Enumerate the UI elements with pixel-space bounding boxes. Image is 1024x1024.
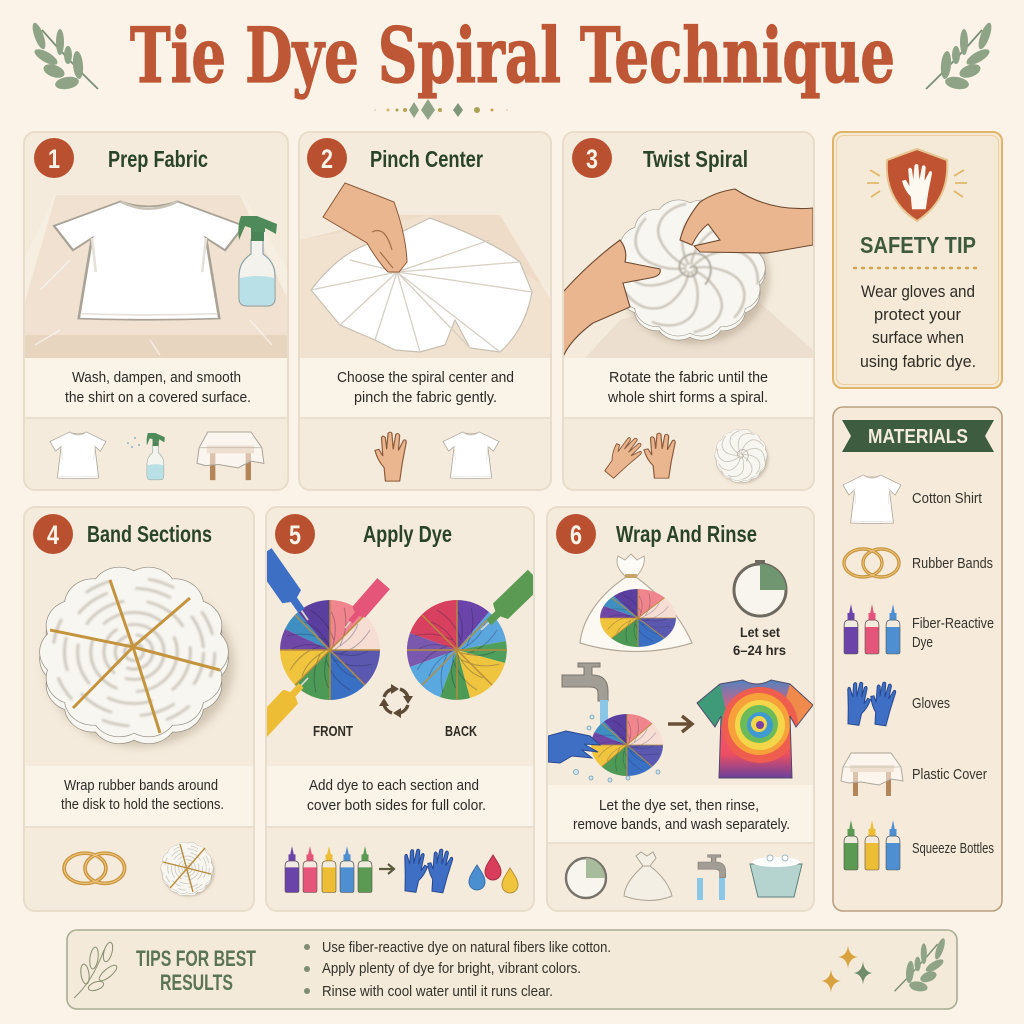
material: cotton shirt: Cotton Shirt [912,491,982,507]
safety text: surface when [872,328,964,347]
step 4 icon strip [64,844,215,897]
material: squeeze bottles [844,820,994,870]
illustration: bag timer rinse and finished shirt [548,554,815,782]
step 2 description: Choose the spiral center and [337,369,514,386]
step 1 icon strip [50,432,264,480]
step 4 description: Wrap rubber bands around [64,777,218,794]
step 2 description: pinch the fabric gently. [354,389,497,406]
icon: tips outline sprig [74,941,119,998]
step 6 description [573,797,790,833]
step 1 number: 1 [48,144,60,174]
step 5 heading: Apply Dye [363,521,452,547]
material: fiber-reactive dye: Dye [912,635,933,651]
tips bullet list: Rinse with cool water until it runs clear. [322,983,553,1000]
step 3 number: 3 [586,144,598,174]
safety text [860,282,976,371]
step 5 description: Add dye to each section and [309,777,479,794]
panel: step 1 prep fabric [24,132,288,490]
illustration: hand pinching fabric [300,183,551,358]
panel: step 4 band sections [24,507,254,911]
step 4 number [33,514,73,554]
material: plastic cover: Plastic Cover [912,767,987,783]
illustration: applying dye front and back [252,548,543,737]
materials banner [842,420,994,452]
panel: materials [833,407,1002,911]
material: rubber bands: Rubber Bands [912,556,993,572]
step 4 description: the disk to hold the sections. [61,796,224,813]
step 4 heading: Band Sections [87,521,212,547]
step 2 heading: Pinch Center [370,146,483,172]
panel: step 5 apply dye [252,507,543,911]
step 3 heading: Twist Spiral [643,146,748,172]
tips heading [136,946,256,995]
material: gloves [843,681,950,726]
illustration: hands twisting disc [563,189,813,358]
step 6 heading: Wrap And Rinse [616,521,757,547]
step 3 description: Rotate the fabric until the [609,369,768,386]
step 2 icon strip [375,432,499,481]
panel: step 6 wrap and rinse [547,507,815,911]
icon: tips right sprig [895,937,947,993]
tips heading: RESULTS [160,970,233,995]
safety text: Wear gloves and [861,282,975,301]
tips bullet list: Use fiber-reactive dye on natural fibers like cotton. [322,939,611,956]
step 6 number [556,514,596,554]
icon: safety shield [867,149,967,221]
step 1 number [34,138,74,178]
step 6 number: 6 [570,520,582,550]
material: gloves: Gloves [912,696,950,712]
material: plastic cover [841,753,987,796]
label: let set time: 6–24 hrs [733,642,786,658]
panel: step 3 twist spiral [563,132,814,490]
safety text: protect your [874,305,961,324]
step 4 number: 4 [47,520,59,550]
step 5 description [307,777,486,814]
step 4 description [61,777,224,813]
step 1 description [65,369,251,406]
panel: step 2 pinch center [299,132,551,490]
safety text: using fabric dye. [860,352,976,371]
panel: safety tip [833,132,1002,388]
label: back: BACK [445,723,477,740]
step 6 icon strip [566,852,802,900]
step 2 number [307,138,347,178]
panel: tips for best results [67,930,957,1009]
step 5 number [275,514,315,554]
title ornament [374,99,508,120]
step 5 icon strip [285,846,518,893]
step 6 description: remove bands, and wash separately. [573,816,790,833]
step 2 number: 2 [321,144,333,174]
material: cotton shirt [843,475,982,524]
material: squeeze bottles: Squeeze Bottles [912,841,994,857]
step 5 number: 5 [289,520,301,550]
safety heading: SAFETY TIP [860,232,976,258]
icon: right sprig [926,21,994,91]
step 2 description [337,369,514,406]
icon: left sprig [30,21,98,91]
material: fiber-reactive dye: Fiber-Reactive [912,616,994,632]
step 3 icon strip [598,431,769,484]
tips bullet list [304,939,611,1000]
tips heading: TIPS FOR BEST [136,946,256,971]
step 1 description: the shirt on a covered surface. [65,389,251,406]
label: front: FRONT [313,723,353,740]
step 6 description: Let the dye set, then rinse, [599,797,759,814]
illustration: shirt on covered table [24,194,288,358]
illustration: banded disc [46,578,234,747]
materials banner: MATERIALS [868,426,968,448]
step 3 number [572,138,612,178]
material: fiber-reactive dye [844,604,994,654]
material: rubber bands [844,549,993,577]
step 3 description: whole shirt forms a spiral. [607,389,768,406]
icon: sparkles [821,946,872,992]
step 3 description [607,369,768,406]
label: let set time [733,624,786,658]
tips bullet list: Apply plenty of dye for bright, vibrant colors. [322,960,581,977]
step 5 description: cover both sides for full color. [307,797,486,814]
label: let set time: Let set [740,624,780,640]
icon: flip arrows [379,684,413,718]
step 1 heading: Prep Fabric [108,146,208,172]
step 1 description: Wash, dampen, and smooth [72,369,241,386]
